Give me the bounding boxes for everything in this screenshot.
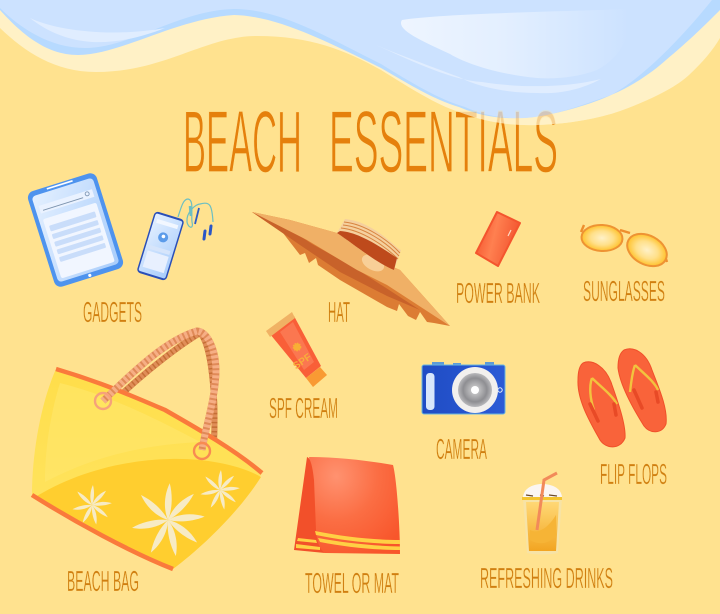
infographic canvas: HAT	[328, 297, 350, 329]
right flip flop	[618, 349, 666, 432]
hat band	[337, 231, 397, 270]
drink	[526, 502, 559, 551]
infographic canvas: POWER BANK	[456, 278, 540, 310]
bag inner highlight	[45, 383, 200, 482]
palm prints	[132, 483, 205, 556]
wave foam	[0, 0, 720, 125]
dome lid	[523, 484, 562, 497]
flash panel	[426, 373, 434, 410]
straw	[537, 473, 557, 530]
item: flip flops	[578, 349, 666, 447]
bridge and arms	[581, 225, 667, 262]
hat crown	[337, 219, 401, 270]
bag lower print	[32, 459, 261, 569]
icon: earphones	[178, 199, 213, 239]
title: BEACH	[183, 92, 302, 191]
highlight: lower	[376, 45, 601, 93]
foam overlapping title	[456, 100, 647, 125]
hat silhouette underside	[252, 212, 450, 326]
towel stripes left	[296, 538, 320, 550]
highlight: large	[401, 9, 630, 78]
item: power bank	[476, 212, 520, 266]
camera body	[422, 365, 505, 414]
hat sun patch	[359, 251, 387, 275]
item: spf cream	[266, 312, 327, 387]
lens	[452, 367, 498, 413]
infographic canvas: CAMERA	[436, 434, 487, 466]
cup	[523, 498, 562, 554]
back rope handle	[124, 333, 214, 441]
icon: phone	[136, 211, 185, 281]
wave water edge	[0, 0, 720, 118]
infographic canvas: SPF CREAM	[269, 393, 338, 425]
bag rings	[95, 393, 111, 409]
hat dark inner edge	[252, 212, 420, 310]
item: towel	[294, 457, 400, 554]
item: refreshing drink	[522, 473, 562, 554]
bag trim top	[56, 369, 262, 473]
hat brim top	[252, 212, 450, 326]
tube body	[270, 316, 321, 378]
highlight: left	[30, 18, 165, 42]
towel stripes right	[315, 531, 400, 550]
bag trim bottom	[32, 495, 173, 569]
right lens	[622, 227, 672, 273]
tube cap	[306, 367, 327, 387]
left lens	[581, 224, 623, 252]
item: camera	[422, 362, 505, 414]
lid rim	[522, 497, 562, 500]
tube crimp	[266, 312, 295, 337]
item: sunglasses	[581, 224, 672, 273]
towel side fold	[294, 457, 325, 553]
front rope handle	[103, 331, 216, 450]
left flip flop	[578, 362, 625, 447]
sun mark	[293, 343, 301, 351]
wave water body	[0, 0, 712, 118]
infographic canvas: GADGETS	[83, 297, 142, 329]
icon: power bank body	[476, 212, 520, 266]
item: hat	[252, 212, 450, 326]
infographic canvas: TOWEL OR MAT	[305, 568, 399, 600]
towel main	[309, 457, 400, 554]
icon: tablet	[26, 171, 125, 289]
sea waves	[0, 0, 720, 125]
spf text: SPF	[291, 352, 314, 372]
bag body	[32, 369, 262, 569]
item: gadgets	[26, 171, 213, 289]
item: beach bag	[32, 331, 262, 569]
camera top buttons	[432, 362, 494, 366]
infographic canvas: BEACH BAG	[67, 566, 139, 598]
